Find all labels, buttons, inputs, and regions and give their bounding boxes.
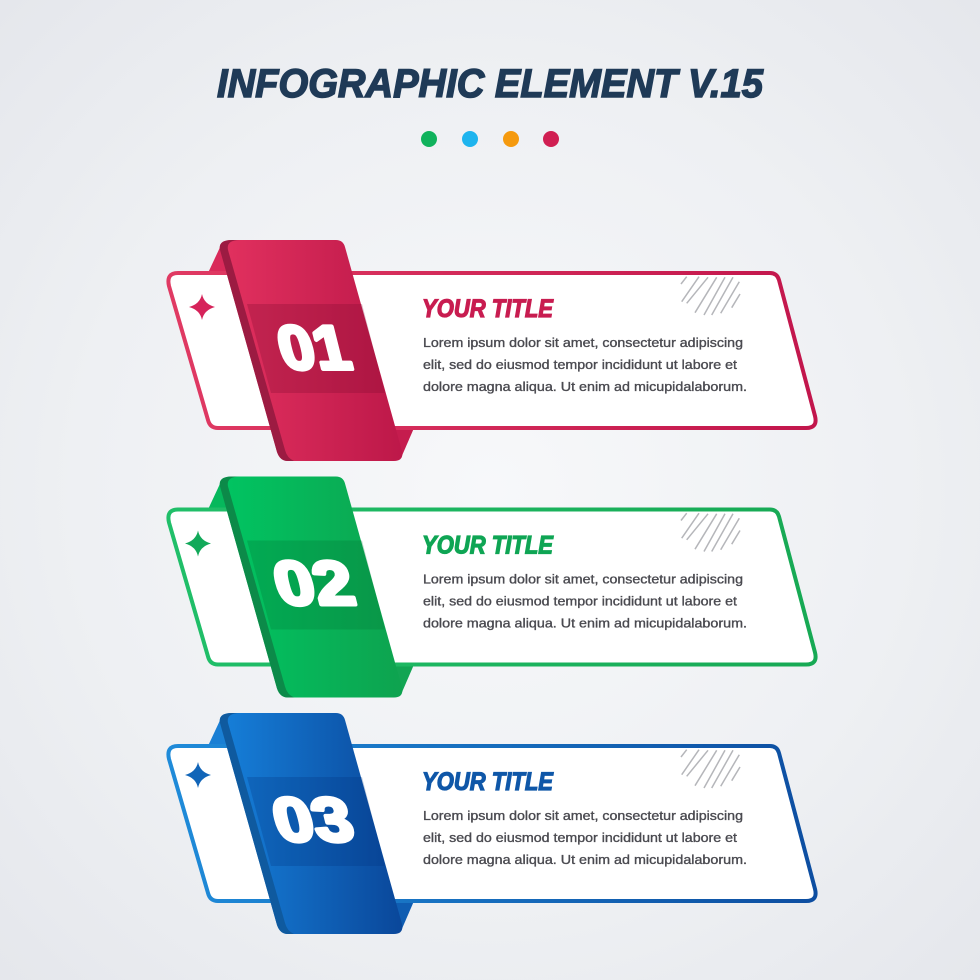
body text: Lorem ipsum dolor sit amet, consectetur adipiscing xyxy=(423,572,743,586)
fold: top left xyxy=(208,243,240,273)
body text xyxy=(423,808,747,867)
card outline xyxy=(168,273,816,428)
body text: Lorem ipsum dolor sit amet, consectetur adipiscing xyxy=(423,335,743,350)
hatch pattern xyxy=(681,750,740,788)
card outline xyxy=(168,510,816,664)
icon: sparkle xyxy=(185,530,211,556)
item title: YOUR TITLE xyxy=(422,768,554,796)
title: INFOGRAPHIC ELEMENT V.15 xyxy=(217,62,764,106)
body text: Lorem ipsum dolor sit amet, consectetur adipiscing xyxy=(423,808,743,823)
body text: elit, sed do eiusmod tempor incididunt ut labore et xyxy=(423,830,737,845)
ribbon xyxy=(220,713,402,934)
fold: bottom right xyxy=(392,901,414,931)
body text: dolore magna aliqua. Ut enim ad micupidalaborum. xyxy=(423,379,747,394)
hatch pattern xyxy=(681,513,740,552)
fold: bottom right xyxy=(392,428,414,458)
body text: dolore magna aliqua. Ut enim ad micupidalaborum. xyxy=(423,852,747,867)
icon: sparkle xyxy=(185,762,211,788)
ribbon xyxy=(220,476,402,698)
body text xyxy=(423,335,747,394)
ribbon xyxy=(220,240,402,461)
number 02: 02 xyxy=(266,549,361,618)
panel: item 02 xyxy=(168,476,816,698)
body text: dolore magna aliqua. Ut enim ad micupidalaborum. xyxy=(423,616,747,630)
colour dots xyxy=(421,131,559,147)
number 01: 01 xyxy=(270,314,357,383)
fold: bottom right xyxy=(392,664,414,694)
panel: item 01 xyxy=(168,240,816,461)
number 03: 03 xyxy=(265,786,360,855)
card outline xyxy=(168,746,816,901)
panel: item 03 xyxy=(168,713,816,934)
hatch pattern xyxy=(681,277,740,315)
item title: YOUR TITLE xyxy=(422,295,554,323)
body text: elit, sed do eiusmod tempor incididunt ut labore et xyxy=(423,357,737,372)
icon: sparkle xyxy=(189,294,215,320)
body text: elit, sed do eiusmod tempor incididunt ut labore et xyxy=(423,594,737,608)
body text xyxy=(423,572,747,630)
fold: top left xyxy=(208,480,240,510)
fold: top left xyxy=(208,716,240,746)
item title: YOUR TITLE xyxy=(422,532,554,560)
